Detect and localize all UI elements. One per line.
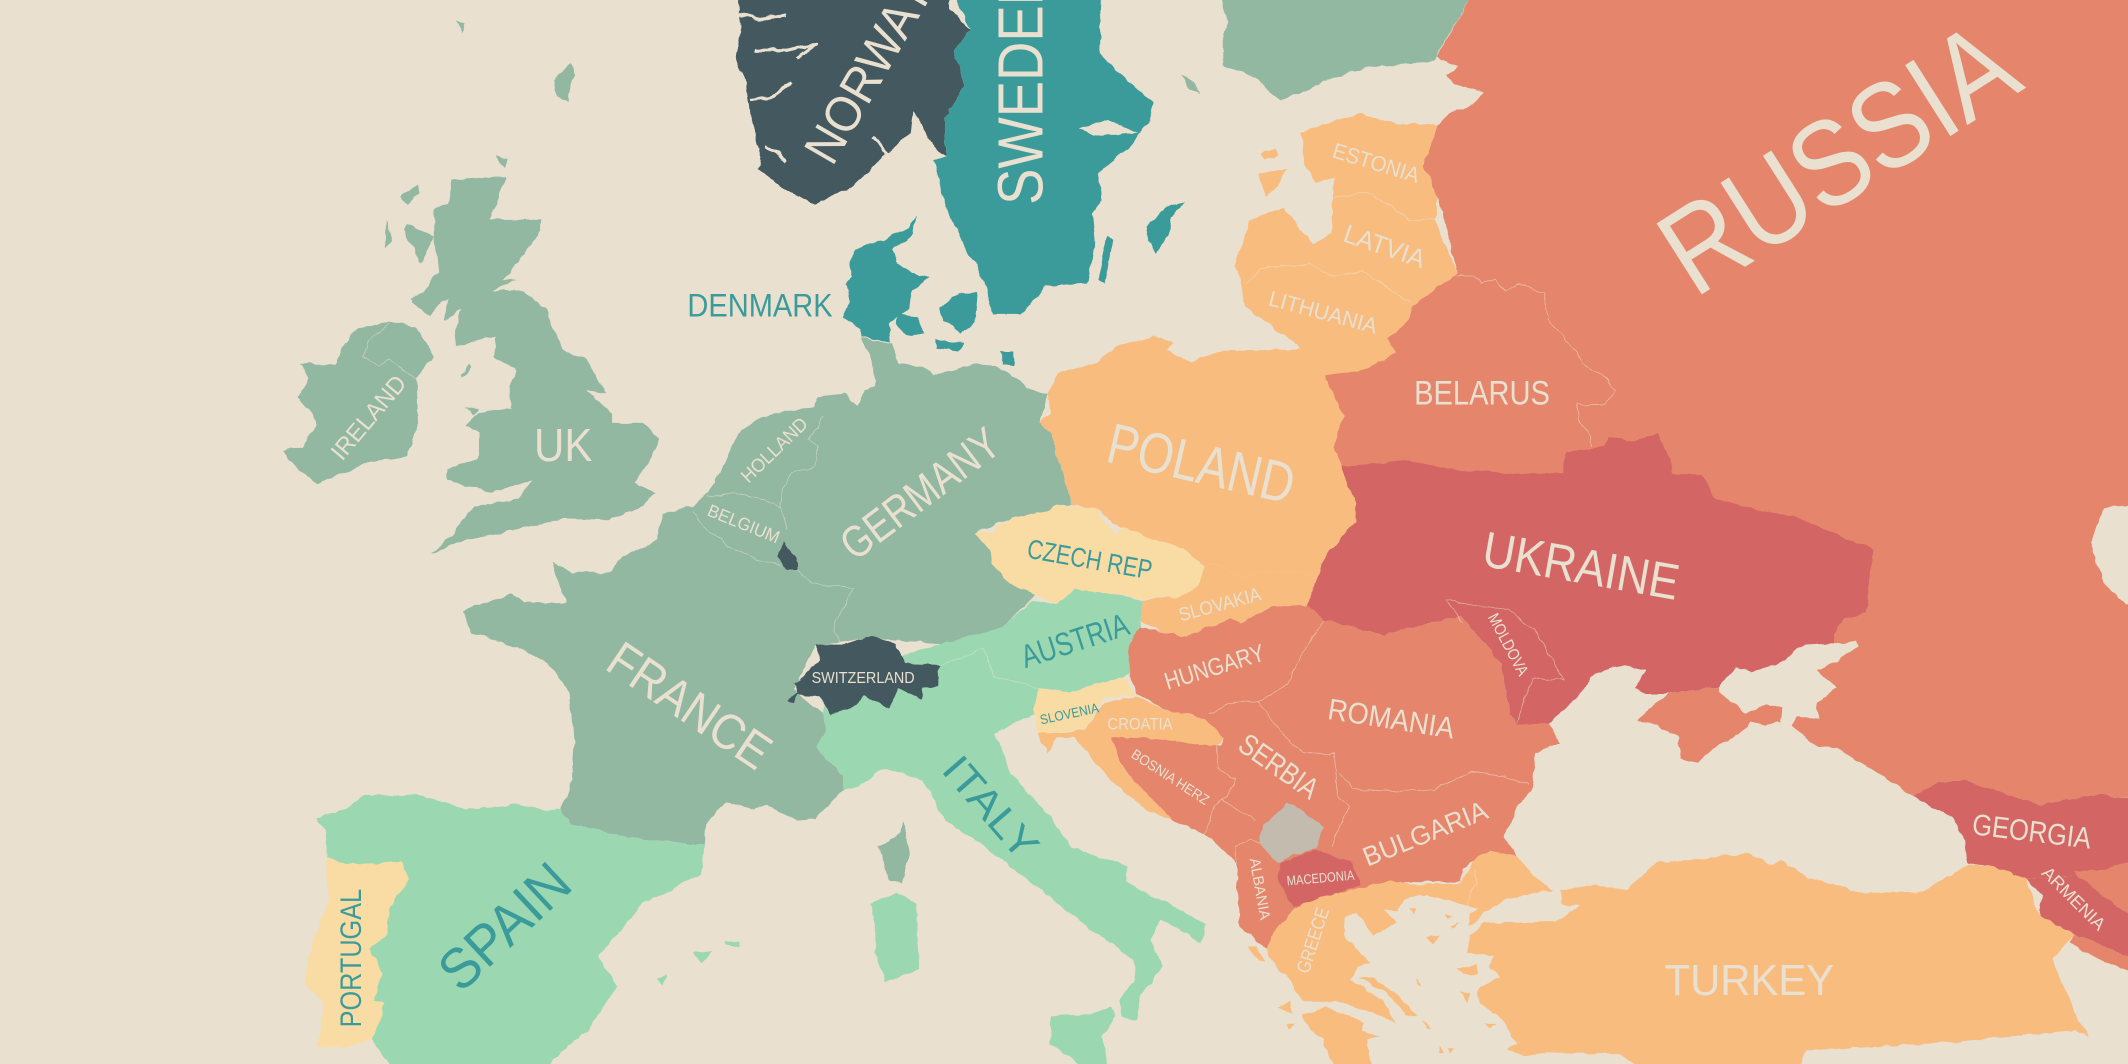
country: Slovenia bbox=[1034, 677, 1136, 733]
label: Croatia: CROATIA bbox=[1107, 716, 1173, 734]
label: Albania: ALBANIA bbox=[1246, 857, 1273, 921]
countries: Balkans, Hungary, Romania, Bulgaria bbox=[1110, 605, 1559, 949]
label: Lithuania: LITHUANIA bbox=[1266, 286, 1381, 339]
label: France: FRANCE bbox=[597, 631, 782, 781]
country: Croatia bbox=[1037, 696, 1224, 820]
islands: Scottish isles bbox=[385, 20, 574, 417]
islands: Balearics bbox=[657, 940, 740, 985]
label: Georgia: GEORGIA bbox=[1970, 808, 2093, 856]
fjords: Norway bbox=[736, 14, 889, 163]
label: Germany: GERMANY bbox=[831, 418, 1009, 570]
island: Sicily bbox=[1050, 1007, 1116, 1064]
label: Denmark: DENMARK bbox=[687, 287, 833, 323]
label: Moldova: MOLDOVA bbox=[1484, 610, 1532, 679]
country: Ireland bbox=[282, 322, 434, 483]
label: Italy: ITALY bbox=[933, 746, 1048, 869]
country: Slovakia bbox=[1141, 563, 1318, 636]
country: Germany, France and Benelux bbox=[461, 338, 1071, 846]
lake: Malaren bbox=[1078, 119, 1139, 136]
island: Gotland bbox=[1145, 202, 1185, 254]
label: Latvia: LATVIA bbox=[1340, 220, 1429, 274]
country: Portugal bbox=[304, 856, 410, 1048]
label: Slovenia: SLOVENIA bbox=[1039, 700, 1101, 727]
island: Oland bbox=[1098, 236, 1113, 284]
country: Italy and Austria bbox=[816, 589, 1205, 1021]
island: Corsica bbox=[878, 820, 909, 884]
label: Belarus: BELARUS bbox=[1414, 375, 1550, 413]
label: Estonia: ESTONIA bbox=[1330, 138, 1423, 188]
label: Holland: HOLLAND bbox=[737, 414, 812, 487]
label: Greece: GREECE bbox=[1293, 905, 1334, 976]
country: UK bbox=[411, 176, 660, 554]
country: Luxembourg bbox=[778, 542, 798, 570]
label: Turkey: TURKEY bbox=[1665, 957, 1834, 1005]
borders: Benelux, Germany bbox=[694, 417, 854, 645]
border: Northern Ireland bbox=[362, 323, 417, 379]
borders: Balkans bbox=[1205, 620, 1528, 863]
country: Spain bbox=[316, 794, 704, 1064]
border: Greece and Turkey bbox=[1467, 869, 1477, 907]
country: Azerbaijan bbox=[2075, 858, 2128, 936]
country: Macedonia bbox=[1278, 850, 1361, 908]
label: Hungary: HUNGARY bbox=[1161, 640, 1268, 696]
country: Azerbaijan south bbox=[2070, 934, 2128, 977]
label: Bulgaria: BULGARIA bbox=[1358, 794, 1493, 872]
label: Czech Republic: CZECH REP bbox=[1025, 533, 1155, 585]
island: Sardinia bbox=[870, 892, 919, 981]
label: Ukraine: UKRAINE bbox=[1479, 521, 1683, 611]
country: Czech Republic bbox=[974, 505, 1205, 604]
country: Switzerland bbox=[787, 636, 940, 714]
border: Moldova bbox=[1445, 600, 1563, 723]
country: Poland bbox=[1040, 337, 1356, 578]
label: UK: UK bbox=[534, 419, 593, 471]
border: Belarus bbox=[1456, 276, 1616, 446]
label: Macedonia: MACEDONIA bbox=[1286, 868, 1356, 888]
label: Switzerland: SWITZERLAND bbox=[812, 670, 915, 687]
country: Armenia bbox=[2026, 875, 2128, 964]
label: Poland: POLAND bbox=[1101, 412, 1301, 517]
country: Norway bbox=[736, 0, 970, 204]
label: Slovakia: SLOVAKIA bbox=[1177, 584, 1264, 626]
label: Romania: ROMANIA bbox=[1325, 693, 1457, 746]
label: Bosnia Herzegovina: BOSNIA HERZ bbox=[1128, 747, 1212, 809]
country: Ukraine bbox=[1307, 434, 1873, 725]
border: Austria and Italy bbox=[940, 649, 1040, 688]
label: Portugal: PORTUGAL bbox=[335, 889, 368, 1027]
country: Russia bbox=[1325, 0, 2128, 805]
islands: Aland bbox=[1181, 75, 1200, 95]
country: Greece and Thrace bbox=[1249, 851, 1553, 1064]
region: Crimea bbox=[1637, 687, 1782, 763]
label: Armenia: ARMENIA bbox=[2038, 863, 2110, 934]
label: Belgium: BELGIUM bbox=[705, 500, 783, 547]
country: Sweden bbox=[934, 0, 1154, 315]
country: Finland bbox=[1217, 0, 1479, 100]
country: Georgia bbox=[1914, 780, 2128, 923]
label: Ireland: IRELAND bbox=[326, 370, 412, 466]
country: Kosovo bbox=[1259, 802, 1325, 863]
country: Denmark bbox=[843, 214, 1014, 365]
label: Spain: SPAIN bbox=[426, 850, 584, 1004]
country: Turkey bbox=[1467, 854, 2089, 1064]
country: Baltic states bbox=[1235, 114, 1458, 376]
label: Serbia: SERBIA bbox=[1232, 728, 1325, 806]
borders: Baltic states bbox=[1247, 191, 1434, 301]
label: Austria: AUSTRIA bbox=[1016, 606, 1134, 675]
islands: Estonia bbox=[1258, 148, 1287, 197]
